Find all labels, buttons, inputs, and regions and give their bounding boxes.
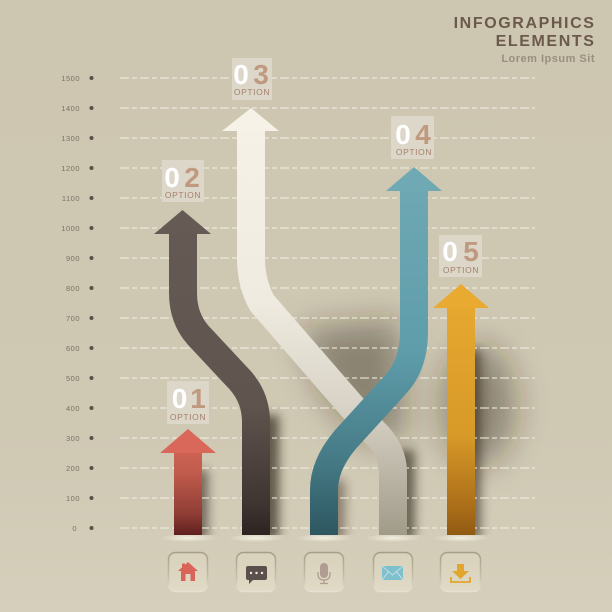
y axis labels: 300 [66,434,80,443]
arrow 5: amber [433,284,489,535]
label 01: OPTION [170,412,206,422]
y axis labels [61,74,80,533]
label 05: 5 [463,236,479,267]
label 04: OPTION [396,147,432,157]
label 02: 2 [184,162,200,193]
title: Lorem Ipsum Sit [501,53,595,65]
y axis labels: 1500 [61,74,80,83]
y axis labels: 1100 [62,194,80,203]
y axis labels: 1000 [61,224,80,233]
label 01 [167,381,209,424]
label 03 [232,58,272,100]
label 01: 0 [172,383,187,414]
title [454,15,596,65]
label 04: 4 [415,119,431,150]
y axis labels: 0 [72,524,77,533]
arrow 3: cream [222,108,393,535]
y axis labels: 1200 [61,164,80,173]
button: chat [236,552,276,592]
y axis labels: 700 [66,314,80,323]
y axis labels: 400 [66,404,80,413]
y axis labels: 1400 [61,104,80,113]
soft shadows [190,320,514,540]
label 05: OPTION [443,265,479,275]
label 01: 1 [190,383,206,414]
label 03: OPTION [234,87,270,97]
label 02: OPTION [165,190,201,200]
y axis labels: 500 [66,374,80,383]
y axis labels: 1300 [61,134,80,143]
arrow 4: teal [324,167,442,535]
y axis labels: 600 [66,344,80,353]
label 05 [439,235,482,277]
arrow 1: red [160,429,216,535]
label 04: 0 [395,119,411,150]
button: home [168,552,208,592]
button: microphone [304,552,344,592]
label 03: 0 [233,59,249,90]
ground highlights [160,534,489,542]
label 03: 3 [253,59,269,90]
title: INFOGRAPHICS [454,15,596,32]
y axis labels: 800 [66,284,80,293]
y axis labels: 100 [66,494,80,503]
arrow 2: dark brown [154,210,256,535]
button: download [440,552,480,592]
title: ELEMENTS [496,33,596,50]
y axis labels: 900 [66,254,80,263]
axis dots [90,76,94,530]
button: mail [374,552,412,592]
y axis labels: 200 [66,464,80,473]
label 05: 0 [442,236,458,267]
label 02: 0 [164,162,180,193]
label 02 [162,160,204,202]
label 04 [391,116,434,159]
